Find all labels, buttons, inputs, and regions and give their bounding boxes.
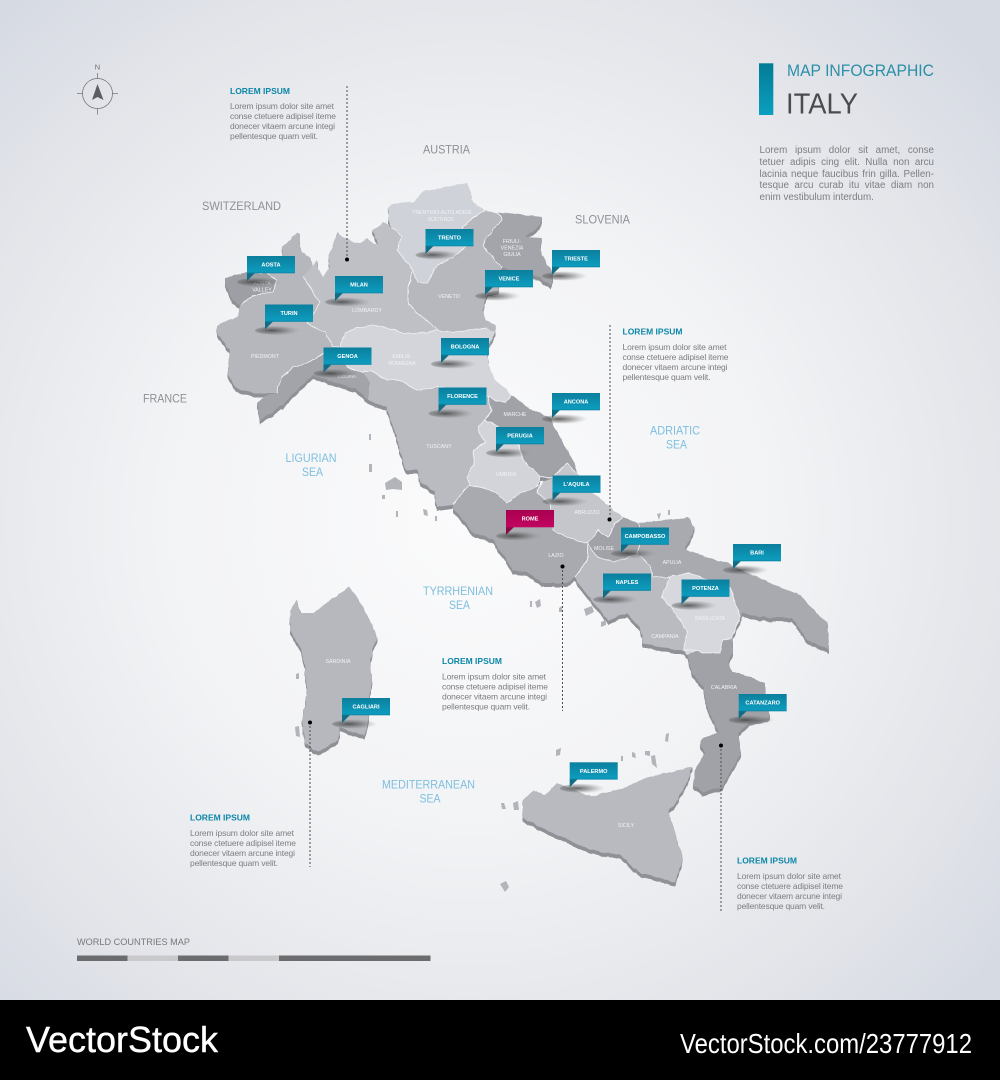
body: pellentesque quam velit. [737, 901, 825, 911]
pin: Perugia: PERUGIA [507, 434, 533, 440]
pin: Potenza: POTENZA [692, 586, 719, 592]
leader line 4 [308, 720, 312, 867]
label: Mediterranean Sea [382, 778, 475, 806]
text block 4 [190, 812, 296, 868]
label: Calabria: CALABRIA [711, 685, 738, 691]
pin: Cagliari [332, 698, 390, 728]
region: Emilia-Romagna [340, 325, 512, 403]
text block 2 [622, 326, 729, 382]
compass ticks [77, 73, 118, 114]
country labels [143, 142, 630, 406]
heading: LOREM IPSUM [622, 326, 682, 336]
label: Venezia: VENEZIA [501, 246, 524, 252]
text block 1 [230, 86, 336, 141]
sea labels [286, 424, 700, 806]
region: Campania [575, 543, 688, 650]
region: Lazio [453, 483, 587, 583]
region: Aosta Valley [225, 272, 277, 305]
label: Romagna: ROMAGNA [388, 361, 416, 367]
compass ring [82, 78, 112, 108]
label: Aosta: AOSTA [253, 281, 271, 287]
pin: Milan [325, 276, 383, 306]
text block 5 [737, 856, 843, 911]
pin: Palermo: PALERMO [580, 769, 608, 775]
pin: Trento [416, 229, 474, 260]
body: pellentesque quam velit. [230, 131, 318, 141]
region: Tuscany [363, 370, 492, 507]
label: Adriatic Sea: ADRIATIC [650, 424, 700, 438]
region: Friuli-Venezia Giulia [483, 212, 553, 285]
pin: Bari [723, 544, 781, 574]
islands [295, 434, 670, 892]
pin: Ancona [542, 393, 600, 424]
label: Campania: CAMPANIA [651, 634, 679, 640]
heading: LOREM IPSUM [230, 86, 290, 96]
pin: Campobasso [611, 528, 669, 558]
body: conse ctetuere adipisel iteme [442, 682, 548, 692]
body: donecer vitaem arcune integi [737, 891, 842, 901]
label: Slovenia: SLOVENIA [575, 212, 630, 226]
label: Molise: MOLISE [594, 546, 614, 552]
pin: Campobasso: CAMPOBASSO [625, 534, 666, 540]
label: Valley: VALLEY [252, 288, 272, 294]
watermark logo text: VectorStock [26, 1019, 219, 1060]
body: conse ctetuere adipisel iteme [230, 111, 336, 121]
body: donecer vitaem arcune integi [622, 362, 728, 372]
region: Liguria [258, 347, 370, 420]
body: Lorem ipsum dolor site amet [442, 672, 547, 682]
pin: Florence: FLORENCE [447, 394, 478, 400]
title accent bar [759, 63, 773, 115]
pin: Catanzaro [729, 694, 787, 724]
intro text: tesque arcu curab itu vitae diam non [760, 180, 934, 191]
leader line 5 [719, 744, 723, 911]
pin: Palermo [560, 762, 618, 793]
label: Liguria: LIGURIA [338, 374, 356, 379]
label: Veneto: VENETO [438, 294, 460, 300]
intro text [760, 145, 934, 203]
label: Sudtirol: SÜDTIROL [428, 216, 454, 223]
region: Calabria [687, 638, 770, 792]
pin: Bari: BARI [750, 550, 764, 556]
label: Austria: AUSTRIA [423, 142, 470, 156]
label: France: FRANCE [143, 392, 187, 406]
body: pellentesque quam velit. [622, 372, 710, 382]
compass arrow [92, 84, 104, 100]
heading: LOREM IPSUM [442, 656, 502, 666]
pin: Catanzaro: CATANZARO [745, 700, 781, 706]
pin: Venice: VENICE [499, 276, 520, 282]
region labels [251, 210, 738, 829]
body: Lorem ipsum dolor site amet [190, 828, 295, 838]
pin: Turin [255, 304, 313, 335]
label: Tyrrhenian Sea: TYRRHENIAN [423, 584, 493, 598]
label: Mediterranean Sea: MEDITERRANEAN [382, 778, 475, 792]
region: Umbria [467, 420, 540, 503]
label: Mediterranean Sea: SEA [420, 792, 440, 806]
pin: Genoa: GENOA [337, 354, 358, 360]
label: Tyrrhenian Sea: SEA [449, 598, 470, 612]
pin: Florence [428, 388, 486, 418]
pin: Potenza [672, 580, 730, 610]
scale bar [77, 956, 430, 961]
title block [759, 62, 934, 120]
heading: LOREM IPSUM [737, 856, 797, 866]
pin: Aosta [237, 256, 295, 286]
intro text: tetuer adipis cing elit. Nulla non arcu [760, 157, 934, 168]
pin: Aosta: AOSTA [261, 262, 281, 268]
compass [77, 62, 118, 114]
label: Trentino-Alto Adige: TRENTINO-ALTO ADIGE [412, 210, 472, 216]
label: Switzerland: SWITZERLAND [202, 199, 281, 213]
subtitle: MAP INFOGRAPHIC [787, 62, 934, 80]
label: Abruzzo: ABRUZZO [574, 510, 600, 516]
region: Sicily [523, 767, 692, 882]
label: Apulia: APULIA [663, 560, 682, 566]
internal region borders [240, 210, 740, 653]
pin: L'Aquila [542, 476, 600, 506]
body: Lorem ipsum dolor site amet [230, 101, 335, 111]
leader line 2 [608, 325, 612, 522]
region: Veneto [408, 210, 502, 333]
region: Sardinia [290, 587, 377, 752]
callout leader lines [308, 86, 723, 911]
label: Marche: MARCHE [504, 412, 527, 418]
pin: Naples: NAPLES [616, 580, 639, 586]
pin: Trieste [542, 250, 600, 280]
pin: Rome (capital) [496, 510, 554, 540]
pin: Perugia [486, 427, 544, 458]
label: Lazio: LAZIO [548, 553, 564, 559]
title: ITALY [786, 88, 858, 120]
label: Ligurian Sea [286, 451, 336, 479]
body: pellentesque quam velit. [190, 858, 278, 868]
body: conse ctetuere adipisel iteme [622, 352, 729, 362]
region: Abruzzo [537, 463, 623, 543]
label: Friuli: FRIULI- [503, 239, 522, 245]
region: Marche [485, 395, 578, 477]
label: Adriatic Sea [650, 424, 700, 452]
text block 3 [442, 656, 548, 712]
intro text: lacinia neque faucibus frin gilla. Pellen- [760, 168, 934, 180]
body: Lorem ipsum dolor site amet [622, 342, 727, 352]
label: Tyrrhenian Sea [423, 584, 493, 612]
region: Trentino-Alto Adige [388, 183, 485, 283]
leader line 1 [345, 86, 349, 262]
pin: Bologna [431, 338, 489, 368]
body: donecer vitaem arcune integi [230, 121, 335, 131]
pin: Venice [475, 270, 533, 300]
pin: L'Aquila: L'AQUILA [563, 482, 590, 488]
label: Adriatic Sea: SEA [666, 438, 687, 452]
label: Sicily: SICILY [618, 823, 635, 829]
intro text: Lorem ipsum dolor sit amet, conse [760, 145, 934, 156]
pin: Bologna: BOLOGNA [451, 344, 479, 350]
body: donecer vitaem arcune integi [442, 692, 547, 702]
pin: Milan: MILAN [350, 282, 368, 288]
body: pellentesque quam velit. [442, 702, 530, 712]
watermark band [0, 1000, 1000, 1080]
label: Ligurian Sea: LIGURIAN [286, 451, 336, 465]
label: Umbria: UMBRIA [496, 472, 517, 478]
pin: Trento: TRENTO [438, 236, 462, 242]
region: Lombardy [303, 222, 438, 347]
footer label: WORLD COUNTRIES MAP [77, 937, 190, 948]
body: donecer vitaem arcune integi [190, 848, 295, 858]
region: Basilicata [662, 573, 740, 655]
region: Piedmont [217, 233, 333, 393]
compass N: N [95, 62, 100, 72]
pin: Cagliari: CAGLIARI [352, 704, 380, 710]
pin: Rome (capital): ROME [522, 516, 539, 522]
region: Apulia [637, 518, 829, 650]
pin: Naples [593, 574, 651, 604]
label: Basilicata: BASILICATA [695, 616, 725, 622]
pin: Genoa [314, 348, 372, 378]
map of Italy [217, 183, 829, 892]
label: Piedmont: PIEDMONT [251, 354, 280, 360]
heading: LOREM IPSUM [190, 812, 250, 822]
mainland regions [217, 183, 829, 882]
intro text: enim vestibulum interdum. [760, 192, 874, 203]
region: Molise [587, 517, 640, 562]
label: Giulia: GIULIA [503, 252, 521, 258]
pin: Turin: TURIN [280, 311, 298, 317]
label: Lombardy: LOMBARDY [352, 308, 382, 314]
label: Sardinia: SARDINIA [325, 659, 351, 665]
pin: Trieste: TRIESTE [564, 256, 588, 262]
pin: Ancona: ANCONA [564, 400, 588, 406]
city pins [237, 229, 787, 793]
body: Lorem ipsum dolor site amet [737, 871, 842, 881]
label: Emilia: EMILIA- [392, 354, 412, 360]
leader line 3 [560, 564, 564, 711]
label: Ligurian Sea: SEA [302, 465, 323, 479]
body: conse ctetuere adipisel iteme [190, 838, 296, 848]
label: Tuscany: TUSCANY [426, 444, 452, 450]
body: conse ctetuere adipisel iteme [737, 881, 843, 891]
